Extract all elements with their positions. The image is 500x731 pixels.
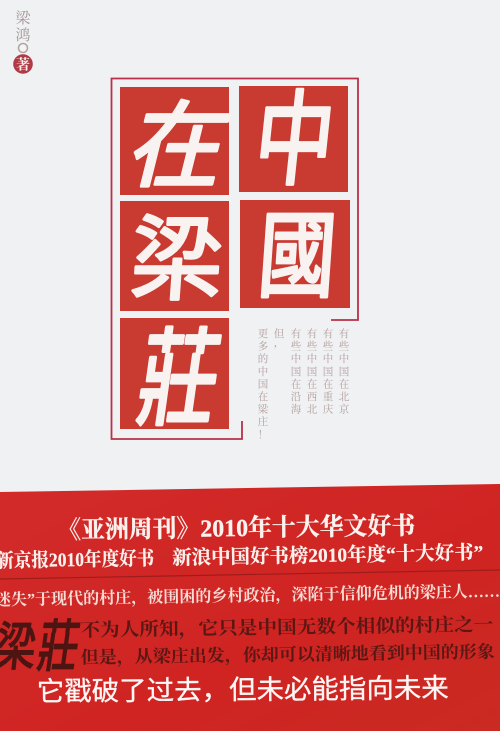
vertical poem text: ！ [258,427,268,442]
award: Sina: 新浪中国好书榜2010年度“十大好书” [172,541,483,569]
red belly band [0,484,500,731]
title panel: 中: 中 [249,58,342,206]
vertical poem text: 国 [291,364,301,379]
vertical poem text: 北 [307,402,318,417]
vertical poem text: 但 [274,326,285,341]
dark description line 2: 但是，从梁庄出发，你却可以清晰地看到中国的形象 [81,642,495,668]
vertical poem text: 京 [339,402,350,417]
title panel: 梁: 梁 [127,185,228,319]
vertical poem text: 梁 [258,402,269,417]
award: Beijing News: 新京报2010年度好书 [0,547,155,572]
vertical poem text [258,326,350,442]
vertical poem text: 在 [258,389,269,404]
author name block [13,9,33,74]
vertical poem text: 些 [307,339,317,354]
vertical poem text: 国 [307,364,317,379]
author seal: 著 [16,58,30,74]
vertical poem text: 有 [291,326,302,341]
vertical poem text: ， [274,335,284,350]
author name: 梁 [15,9,31,27]
title panel: 在: 在 [118,71,246,207]
vertical poem text: 西 [307,389,318,404]
vertical poem text: 有 [307,326,318,341]
title frame [112,78,358,439]
vertical poem text: 中 [339,351,349,366]
vertical poem text: 沿 [291,389,302,404]
title panel: 莊: 莊 [130,295,231,447]
vertical poem text: 更 [258,326,269,341]
vertical poem text: 重 [323,389,334,404]
vertical poem text: 在 [339,376,350,391]
vertical poem text: 中 [291,351,301,366]
author name: 鸿 [15,27,31,44]
title panel: 國: 國 [254,180,341,316]
vertical poem text: 中 [258,364,268,379]
vertical poem text: 多 [258,339,268,354]
vertical poem text: 在 [307,376,318,391]
icon: small ring [18,44,28,52]
vertical poem text: 庆 [323,402,334,417]
band fold line [0,570,500,579]
awards line [0,541,483,572]
vertical poem text: 在 [291,376,302,391]
vertical poem text: 国 [323,364,333,379]
slogan: 它戳破了过去，但未必能指向未来 [37,673,449,707]
vertical poem text: 海 [291,402,302,417]
vertical poem text: 些 [323,339,333,354]
vertical poem text: 国 [258,376,268,391]
large calligraphy: 梁莊 [0,616,83,679]
vertical poem text: 些 [291,339,301,354]
vertical poem text: 中 [307,351,317,366]
vertical poem text: 有 [339,326,350,341]
dark description line 1: 不为人所知，它只是中国无数个相似的村庄之一 [80,614,494,641]
vertical poem text: 的 [258,351,269,366]
large calligraphy: 梁莊: 莊 [34,616,83,679]
vertical poem text: 北 [339,389,350,404]
author name [15,9,31,44]
vertical poem text: 有 [323,326,334,341]
award heading: 《亚洲周刊》2010年十大华文好书 [57,511,416,544]
vertical poem text: 国 [339,364,349,379]
vertical poem text: 些 [339,339,349,354]
vertical poem text: 庄 [258,414,269,429]
vertical poem text: 在 [323,376,334,391]
vertical poem text: 中 [323,351,333,366]
